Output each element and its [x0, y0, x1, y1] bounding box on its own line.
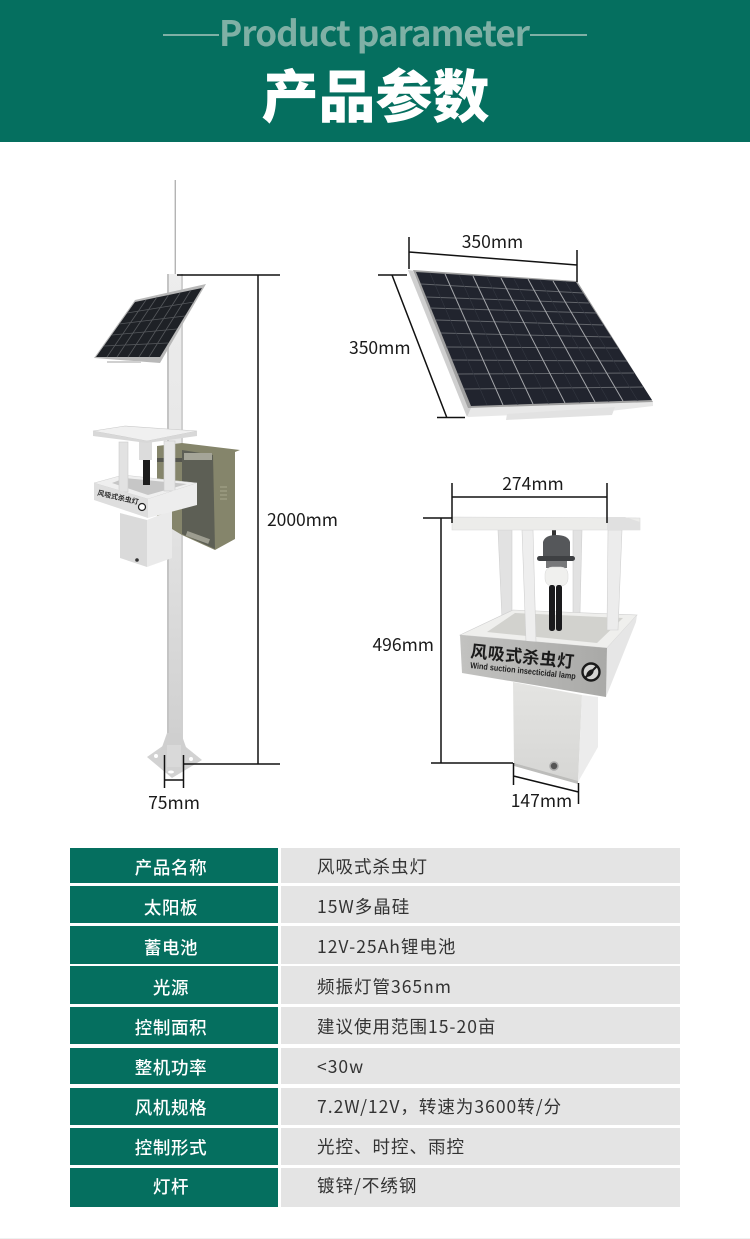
row: control mode: 光控、时控、雨控 [317, 1134, 465, 1159]
lower housing [513, 682, 598, 784]
row: light source [70, 966, 680, 1004]
dimension: height 2000mm: 2000mm [267, 507, 338, 532]
row: light source: 光源 [153, 975, 189, 1000]
control cabinet [157, 443, 240, 550]
lamp sign: 风吸式杀虫灯 [96, 488, 139, 507]
dimension: lamp width 274mm [452, 471, 607, 523]
dimension: lamp height 496mm [372, 518, 513, 763]
pole [167, 274, 183, 746]
row: control mode: 控制形式 [135, 1135, 207, 1160]
dimension: pole 75mm: 75mm [148, 790, 200, 815]
dimension: pole 75mm [148, 755, 200, 815]
dimension: height 2000mm [177, 275, 338, 764]
row: solar panel: 太阳板 [144, 895, 198, 920]
dimension: lamp height 496mm: 496mm [372, 632, 434, 657]
row: product name: 风吸式杀虫灯 [317, 854, 428, 879]
row: light source: 频振灯管365nm [317, 974, 452, 999]
row: power [70, 1048, 680, 1084]
row: pole material: 镀锌/不绣钢 [317, 1173, 417, 1198]
row: battery [70, 926, 680, 964]
small solar panel [94, 284, 206, 363]
subtitle: Product parameter: Product parameter [219, 6, 531, 57]
lightning rod [175, 180, 176, 274]
pole base plate [147, 733, 202, 778]
title: 产品参数 [262, 52, 490, 134]
sign panel: 风吸式杀虫灯 [469, 637, 576, 673]
dimension: housing width 147mm [511, 763, 578, 813]
front posts [522, 530, 536, 642]
product photo: solar panel [408, 270, 653, 420]
row: battery: 12V-25Ah锂电池 [317, 934, 456, 959]
dimension: panel depth 350mm: 350mm [349, 335, 411, 360]
row: product name [70, 848, 680, 883]
row: control area: 控制面积 [135, 1015, 207, 1040]
row: fan spec: 7.2W/12V，转速为3600转/分 [317, 1094, 562, 1119]
row: solar panel: 15W多晶硅 [317, 894, 410, 919]
icon: no-insect [582, 664, 600, 680]
roof, posts and UV tube [93, 426, 197, 492]
box top [460, 610, 637, 648]
lamp housing [94, 475, 197, 567]
product photo: lamp head close-up [452, 517, 640, 784]
row: pole material [70, 1168, 680, 1207]
row: control area: 建议使用范围15-20亩 [317, 1014, 496, 1039]
row: pole material: 灯杆 [153, 1174, 189, 1199]
row: battery: 蓄电池 [144, 935, 198, 960]
product photo: full lamp on pole [93, 180, 240, 778]
row: fan spec: 风机规格 [135, 1095, 207, 1120]
dimension: housing width 147mm: 147mm [511, 788, 572, 813]
dimension: panel width 350mm: 350mm [462, 229, 523, 254]
dimension: panel depth 350mm [349, 275, 465, 418]
row: fan spec [70, 1088, 680, 1125]
parameter table [70, 848, 680, 1207]
panel grid lines [421, 284, 643, 389]
dimension: lamp width 274mm: 274mm [502, 471, 564, 496]
dimension: panel width 350mm [409, 229, 577, 282]
UV lamp [537, 530, 575, 631]
row: control area [70, 1007, 680, 1044]
header banner [0, 0, 750, 142]
lamp sign [94, 483, 197, 518]
sign panel: Wind suction insecticidal lamp [470, 660, 576, 681]
row: power: <30w [317, 1054, 364, 1079]
sign panel [460, 615, 637, 697]
back posts [498, 530, 512, 619]
row: product name: 产品名称 [135, 855, 207, 880]
row: control mode [70, 1128, 680, 1165]
roof [452, 517, 640, 530]
row: solar panel [70, 886, 680, 923]
row: power: 整机功率 [135, 1055, 207, 1080]
